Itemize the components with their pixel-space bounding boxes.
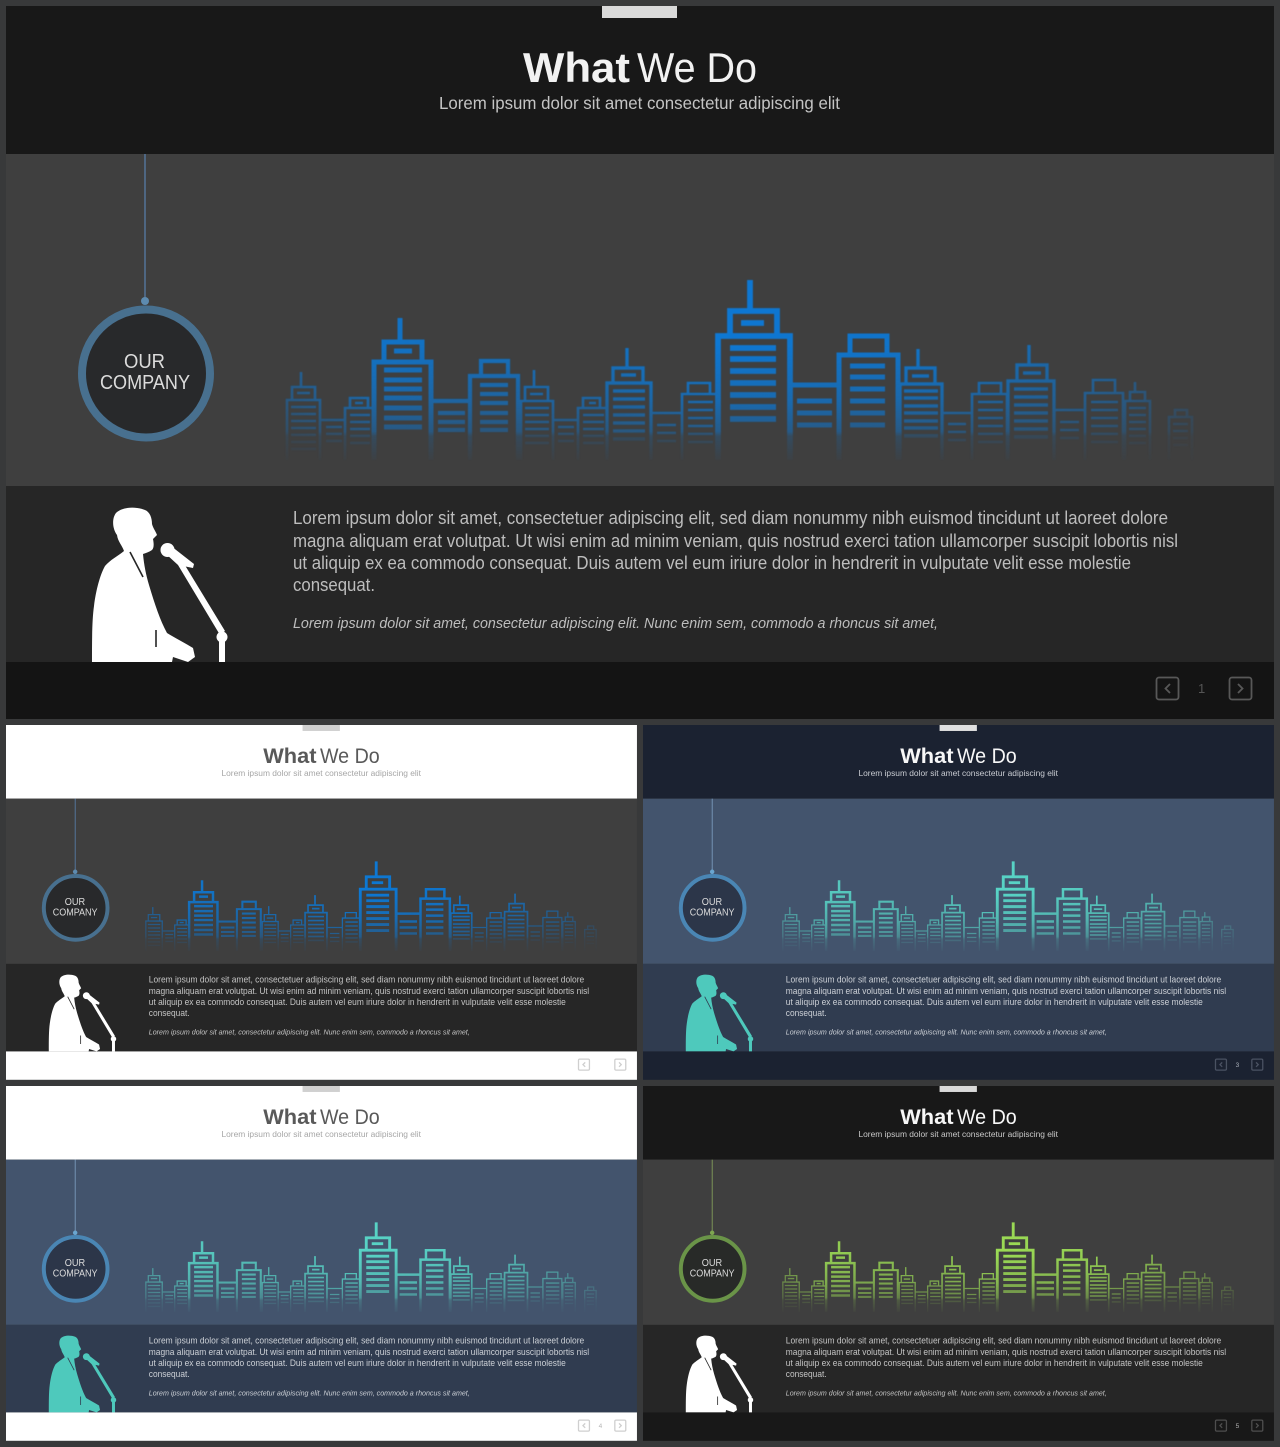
company badge: COMPANY bbox=[100, 371, 190, 394]
skyline bbox=[146, 861, 596, 951]
skyline panel bbox=[6, 1160, 637, 1325]
title: We Do bbox=[320, 745, 380, 768]
title: We Do bbox=[637, 44, 757, 91]
body text: magna aliquam erat volutpat. Ut wisi enim ad minim veniam, quis nostrud exerci tation ullamcorper suscipit lobortis nisl bbox=[786, 1347, 1226, 1357]
body text: ut aliquip ex ea commodo consequat. Duis autem vel eum iriure dolor in hendrerit in vulputate velit esse molestie bbox=[293, 553, 1131, 573]
skyline bbox=[783, 1222, 1233, 1312]
italic note: Lorem ipsum dolor sit amet, consectetur adipiscing elit. Nunc enim sem, commodo a rhoncus sit amet, bbox=[786, 1389, 1107, 1398]
speaker silhouette bbox=[49, 975, 116, 1051]
pager bbox=[578, 1059, 626, 1070]
header band bbox=[6, 1086, 637, 1160]
speaker silhouette bbox=[686, 1336, 753, 1412]
slide 5: dark with green accent bbox=[643, 1086, 1274, 1441]
tab marker bbox=[940, 1086, 977, 1092]
body text: magna aliquam erat volutpat. Ut wisi enim ad minim veniam, quis nostrud exerci tation ullamcorper suscipit lobortis nisl bbox=[149, 1347, 589, 1357]
slide 1: dark large bbox=[6, 6, 1274, 719]
speaker silhouette bbox=[92, 508, 228, 662]
title: What bbox=[900, 1106, 954, 1129]
text panel bbox=[6, 964, 637, 1051]
skyline panel bbox=[6, 154, 1274, 486]
body text: consequat. bbox=[786, 1369, 827, 1379]
skyline bbox=[783, 861, 1233, 951]
pager bbox=[1215, 1420, 1263, 1431]
speaker silhouette bbox=[49, 1336, 116, 1412]
italic note: Lorem ipsum dolor sit amet, consectetur adipiscing elit. Nunc enim sem, commodo a rhoncus sit amet, bbox=[149, 1389, 470, 1398]
body text bbox=[293, 508, 1178, 595]
slide 4: white header, navy body bbox=[6, 1086, 637, 1441]
footer bar bbox=[6, 1412, 637, 1441]
subtitle: Lorem ipsum dolor sit amet consectetur adipiscing elit bbox=[221, 768, 422, 778]
company badge: OUR bbox=[702, 1258, 722, 1269]
company badge bbox=[44, 1160, 108, 1301]
footer bar bbox=[643, 1051, 1274, 1080]
body text: magna aliquam erat volutpat. Ut wisi enim ad minim veniam, quis nostrud exerci tation ullamcorper suscipit lobortis nisl bbox=[149, 986, 589, 996]
body text: consequat. bbox=[149, 1369, 190, 1379]
skyline panel bbox=[6, 799, 637, 964]
body text bbox=[786, 1336, 1226, 1379]
text panel bbox=[643, 1325, 1274, 1412]
company badge bbox=[681, 1160, 745, 1301]
company badge: OUR bbox=[702, 897, 722, 908]
company badge: COMPANY bbox=[690, 908, 735, 919]
pager: 5 bbox=[1236, 1423, 1240, 1430]
footer bar bbox=[6, 662, 1274, 719]
body text: magna aliquam erat volutpat. Ut wisi enim ad minim veniam, quis nostrud exerci tation ullamcorper suscipit lobortis nisl bbox=[786, 986, 1226, 996]
skyline panel bbox=[643, 799, 1274, 964]
italic note: Lorem ipsum dolor sit amet, consectetur adipiscing elit. Nunc enim sem, commodo a rhoncus sit amet, bbox=[786, 1028, 1107, 1037]
body text: ut aliquip ex ea commodo consequat. Duis autem vel eum iriure dolor in hendrerit in vulputate velit esse molestie bbox=[149, 1358, 566, 1368]
body text bbox=[149, 975, 589, 1018]
body text bbox=[149, 1336, 589, 1379]
header band bbox=[6, 6, 1274, 154]
body text: consequat. bbox=[149, 1008, 190, 1018]
text panel bbox=[6, 1325, 637, 1412]
pager: 2 bbox=[599, 1062, 603, 1069]
italic note: Lorem ipsum dolor sit amet, consectetur adipiscing elit. Nunc enim sem, commodo a rhoncus sit amet, bbox=[149, 1028, 470, 1037]
text panel bbox=[6, 486, 1274, 662]
slide 3: navy bbox=[643, 725, 1274, 1080]
text panel bbox=[643, 964, 1274, 1051]
tab marker bbox=[602, 6, 677, 18]
title: We Do bbox=[320, 1106, 380, 1129]
body text: ut aliquip ex ea commodo consequat. Duis autem vel eum iriure dolor in hendrerit in vulputate velit esse molestie bbox=[786, 1358, 1203, 1368]
body text: Lorem ipsum dolor sit amet, consectetuer adipiscing elit, sed diam nonummy nibh euismod tincidunt ut laoreet dolore bbox=[149, 1336, 584, 1346]
header band bbox=[643, 1086, 1274, 1160]
footer bar bbox=[6, 1051, 637, 1080]
title: What bbox=[263, 745, 317, 768]
body text: Lorem ipsum dolor sit amet, consectetuer adipiscing elit, sed diam nonummy nibh euismod tincidunt ut laoreet dolore bbox=[786, 975, 1221, 985]
title: What bbox=[263, 1106, 317, 1129]
body text: magna aliquam erat volutpat. Ut wisi enim ad minim veniam, quis nostrud exerci tation ullamcorper suscipit lobortis nisl bbox=[293, 531, 1178, 551]
header band bbox=[6, 725, 637, 799]
body text: Lorem ipsum dolor sit amet, consectetuer adipiscing elit, sed diam nonummy nibh euismod tincidunt ut laoreet dolore bbox=[149, 975, 584, 985]
speaker silhouette bbox=[686, 975, 753, 1051]
body text: Lorem ipsum dolor sit amet, consectetuer adipiscing elit, sed diam nonummy nibh euismod tincidunt ut laoreet dolore bbox=[293, 508, 1168, 528]
subtitle: Lorem ipsum dolor sit amet consectetur adipiscing elit bbox=[221, 1129, 422, 1139]
body text bbox=[786, 975, 1226, 1018]
italic note: Lorem ipsum dolor sit amet, consectetur adipiscing elit. Nunc enim sem, commodo a rhoncus sit amet, bbox=[293, 615, 938, 632]
body text: ut aliquip ex ea commodo consequat. Duis autem vel eum iriure dolor in hendrerit in vulputate velit esse molestie bbox=[149, 997, 566, 1007]
body text: consequat. bbox=[786, 1008, 827, 1018]
pager bbox=[578, 1420, 626, 1431]
pager bbox=[1215, 1059, 1263, 1070]
tab marker bbox=[303, 725, 340, 731]
pager bbox=[1156, 678, 1252, 700]
body text: Lorem ipsum dolor sit amet, consectetuer adipiscing elit, sed diam nonummy nibh euismod tincidunt ut laoreet dolore bbox=[786, 1336, 1221, 1346]
company badge bbox=[44, 799, 108, 940]
subtitle: Lorem ipsum dolor sit amet consectetur adipiscing elit bbox=[858, 768, 1059, 778]
body text: ut aliquip ex ea commodo consequat. Duis autem vel eum iriure dolor in hendrerit in vulputate velit esse molestie bbox=[786, 997, 1203, 1007]
skyline bbox=[146, 1222, 596, 1312]
company badge bbox=[681, 799, 745, 940]
title: What bbox=[900, 745, 954, 768]
company badge: COMPANY bbox=[53, 908, 98, 919]
subtitle: Lorem ipsum dolor sit amet consectetur adipiscing elit bbox=[858, 1129, 1059, 1139]
pager: 4 bbox=[599, 1423, 603, 1430]
pager: 3 bbox=[1236, 1062, 1240, 1069]
tab marker bbox=[303, 1086, 340, 1092]
company badge: OUR bbox=[65, 897, 85, 908]
company badge bbox=[82, 154, 210, 438]
subtitle: Lorem ipsum dolor sit amet consectetur adipiscing elit bbox=[439, 93, 840, 113]
tab marker bbox=[940, 725, 977, 731]
title: We Do bbox=[957, 1106, 1017, 1129]
slide 2: white header, dark body bbox=[6, 725, 637, 1080]
company badge: OUR bbox=[65, 1258, 85, 1269]
footer bar bbox=[643, 1412, 1274, 1441]
title: We Do bbox=[957, 745, 1017, 768]
company badge: COMPANY bbox=[53, 1269, 98, 1280]
company badge: COMPANY bbox=[690, 1269, 735, 1280]
skyline panel bbox=[643, 1160, 1274, 1325]
company badge: OUR bbox=[124, 350, 165, 373]
pager: 1 bbox=[1198, 681, 1205, 696]
skyline bbox=[287, 280, 1192, 460]
body text: consequat. bbox=[293, 575, 375, 595]
header band bbox=[643, 725, 1274, 799]
title: What bbox=[523, 44, 630, 91]
